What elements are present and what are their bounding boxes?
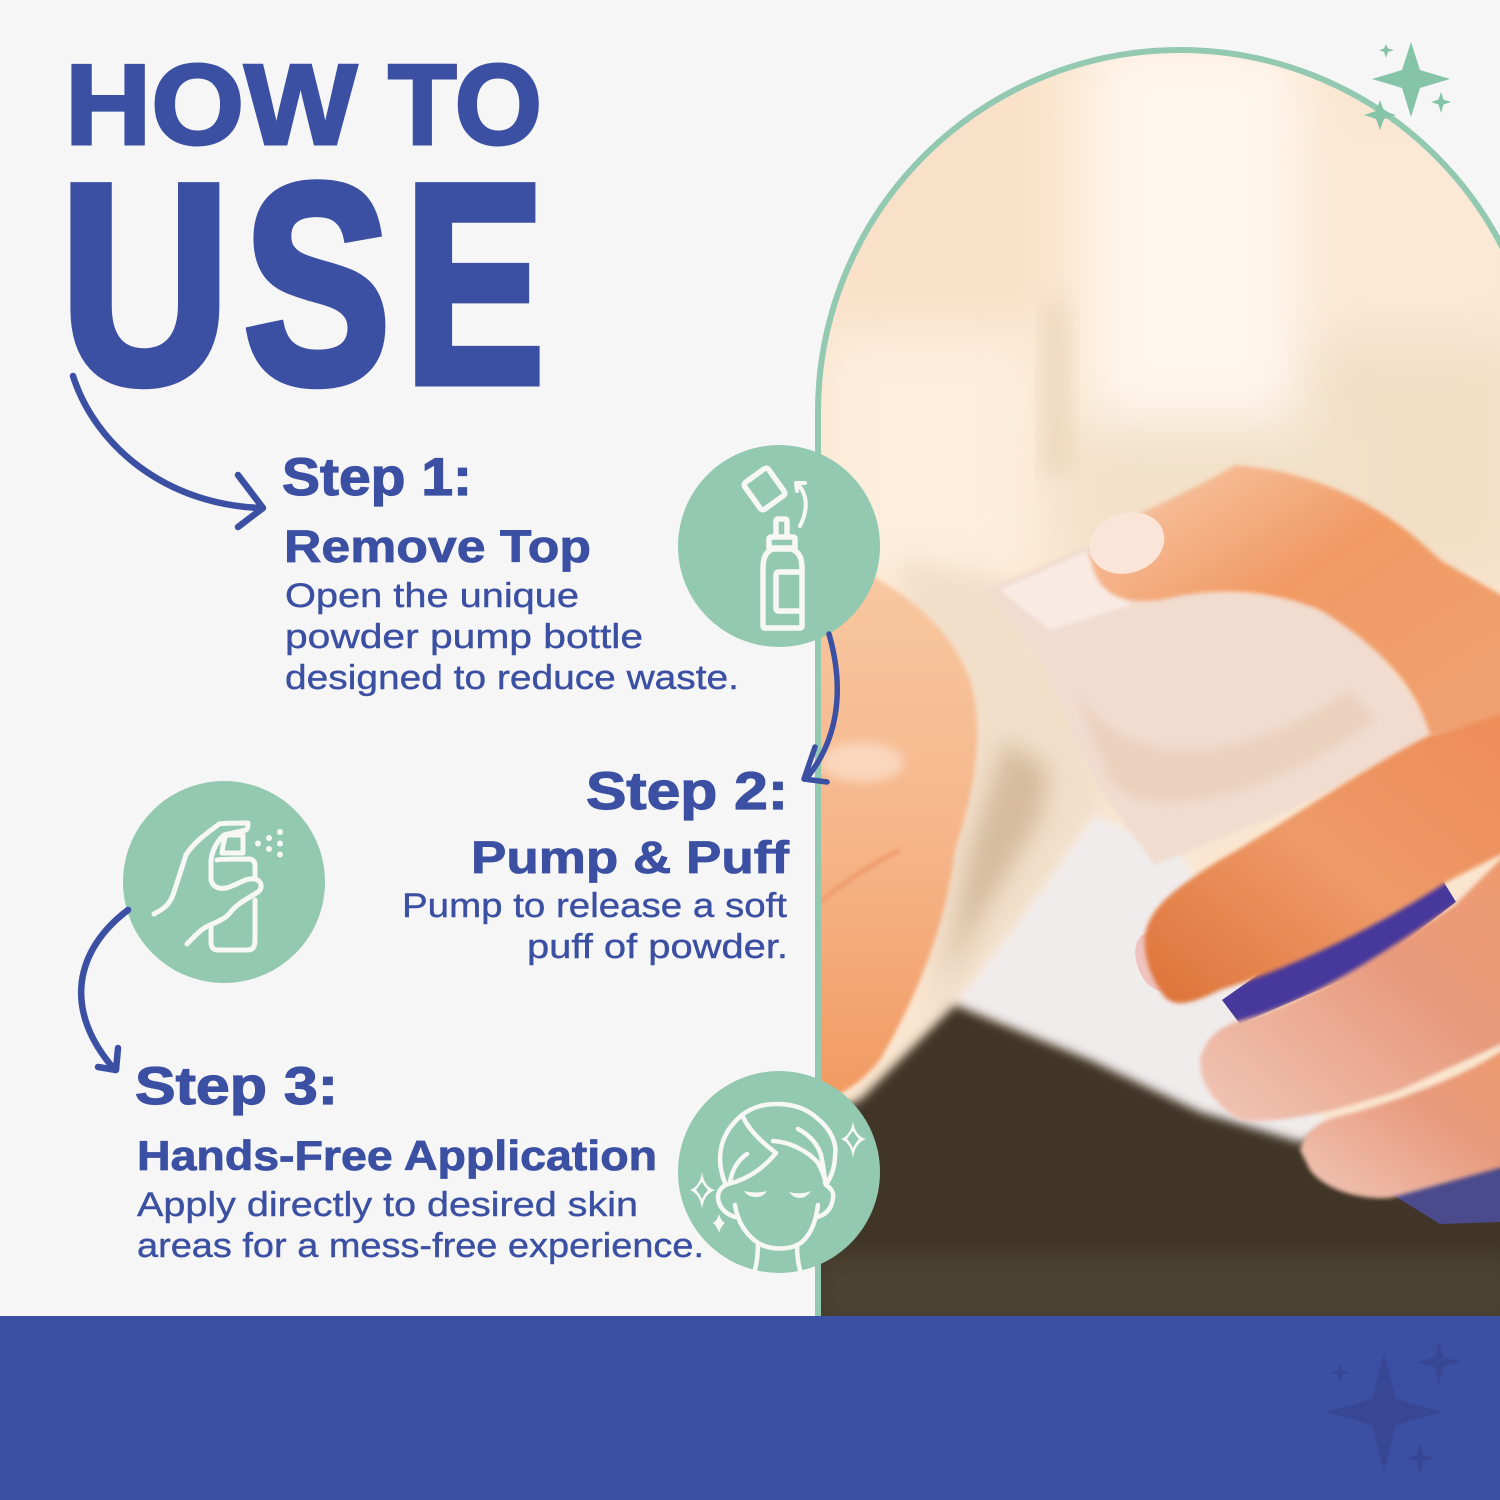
arch outline <box>818 50 1500 1316</box>
sparkle stars on bottom band <box>1326 1340 1462 1474</box>
bottle <box>1002 558 1427 865</box>
step 2 body <box>402 887 788 966</box>
middle fingertip shadow <box>1135 934 1162 991</box>
pinky <box>1300 1045 1500 1198</box>
step 3 text <box>135 1057 704 1265</box>
step 3 body: Apply directly to desired skin <box>137 1186 638 1224</box>
arrow: title to step 1 <box>73 376 263 527</box>
left hand <box>815 550 977 1100</box>
index finger <box>1090 465 1500 735</box>
step 2 body: puff of powder. <box>527 928 788 966</box>
step 3 subheading: Hands-Free Application <box>137 1132 657 1179</box>
step 1 subheading: Remove Top <box>284 521 591 572</box>
bottle purple band <box>1222 876 1456 1024</box>
title <box>60 42 544 443</box>
photo: hands pumping powder bottle <box>810 40 1500 1330</box>
bottom band <box>0 1316 1500 1500</box>
step 1 heading: Step 1: <box>282 448 472 507</box>
title line: use: U <box>60 126 230 443</box>
title line: use <box>60 126 544 443</box>
icon: face with sparkles <box>678 1071 880 1273</box>
title line: use: S <box>244 126 390 443</box>
shirt folds <box>909 567 995 612</box>
step 1 body: designed to reduce waste. <box>285 659 739 697</box>
title line: use: E <box>404 126 544 443</box>
step 2 subheading: Pump & Puff <box>471 832 790 883</box>
step 1 body: powder pump bottle <box>285 618 643 656</box>
step 1 body: Open the unique <box>285 577 579 615</box>
step 2 text <box>402 762 790 966</box>
step 2 body: Pump to release a soft <box>402 887 788 925</box>
arrow: step 2 to step 3 <box>81 910 128 1070</box>
dark trousers <box>810 1005 1500 1330</box>
step 1 body <box>285 577 739 697</box>
step 1 text <box>282 448 739 697</box>
title line: how to <box>65 42 542 169</box>
ring finger <box>1200 850 1500 1121</box>
title line: how to: HOW <box>65 42 357 169</box>
step 3 body: areas for a mess-free experience. <box>137 1227 704 1265</box>
arrow: step 1 to step 2 <box>804 634 837 782</box>
title line: how to: TO <box>388 42 542 169</box>
step 2 heading: Step 2: <box>586 762 788 821</box>
icon: bottle with top removed <box>678 445 880 647</box>
middle finger <box>1145 712 1500 1003</box>
step 3 body <box>137 1186 704 1265</box>
thumbnail <box>1090 512 1164 574</box>
white cloth <box>956 814 1325 1144</box>
step 3 heading: Step 3: <box>135 1057 338 1116</box>
icon: hand pumping spray <box>123 781 325 983</box>
sparkle stars top right <box>1364 42 1451 130</box>
